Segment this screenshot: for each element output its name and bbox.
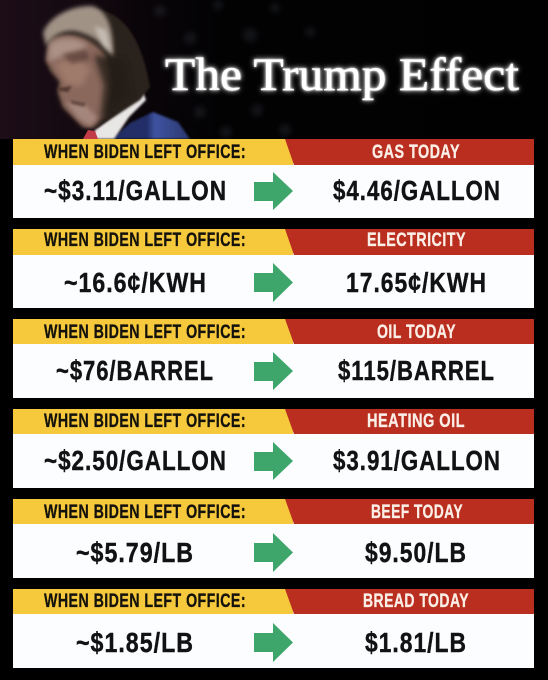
panel: beef: ~$5.79/LB <box>76 537 194 568</box>
panel: oil: OIL TODAY <box>377 322 456 343</box>
panel: gas <box>13 139 534 218</box>
jowl crease <box>70 100 86 107</box>
panel: heating oil: $3.91/GALLON <box>333 445 501 476</box>
face <box>46 35 110 128</box>
head base <box>46 10 150 128</box>
suit jacket <box>112 112 190 139</box>
portrait photo <box>43 6 190 139</box>
panel: bread: WHEN BIDEN LEFT OFFICE: <box>44 591 246 612</box>
panel: heating oil: HEATING OIL <box>367 411 465 432</box>
panel: gas: ~$3.11/GALLON <box>44 175 227 206</box>
hair highlight <box>94 26 112 54</box>
arrow <box>254 172 293 210</box>
arrow <box>254 263 293 302</box>
arrow <box>254 352 293 390</box>
panel: bread: ~$1.85/LB <box>76 627 194 658</box>
panel: heating oil: ~$2.50/GALLON <box>44 445 227 476</box>
arrow <box>254 533 293 572</box>
eye socket <box>62 50 90 64</box>
panel: bread <box>13 589 534 668</box>
mouth <box>58 86 72 92</box>
panel: electricity: ELECTRICITY <box>367 230 466 251</box>
panel: beef <box>13 499 534 578</box>
neck and jaw highlight <box>66 102 98 126</box>
panel: gas: WHEN BIDEN LEFT OFFICE: <box>44 142 246 163</box>
panel: electricity <box>13 229 534 308</box>
panel: gas: $4.46/GALLON <box>333 175 501 206</box>
panel: oil: WHEN BIDEN LEFT OFFICE: <box>44 322 246 343</box>
panel: oil: $115/BARREL <box>338 355 495 386</box>
panel: beef: WHEN BIDEN LEFT OFFICE: <box>44 502 246 523</box>
face side shading <box>92 52 114 120</box>
panel: oil <box>13 319 534 398</box>
title: The Trump Effect <box>165 49 519 101</box>
panel: electricity: ~16.6¢/KWH <box>64 267 207 298</box>
arrow <box>254 623 293 662</box>
panel: oil: ~$76/BARREL <box>56 355 214 386</box>
panel: bread: BREAD TODAY <box>363 591 469 612</box>
panel: bread: $1.81/LB <box>365 627 467 658</box>
panel: electricity: 17.65¢/KWH <box>346 267 487 298</box>
forehead highlight <box>48 38 88 62</box>
panel: beef: BEEF TODAY <box>371 502 463 523</box>
necktie <box>83 130 98 139</box>
header background with faint stars <box>0 0 316 139</box>
arrow <box>254 442 293 480</box>
panel: gas: GAS TODAY <box>372 142 460 163</box>
panel: heating oil: WHEN BIDEN LEFT OFFICE: <box>44 411 246 432</box>
front hair <box>43 6 113 58</box>
shirt collar <box>93 92 146 139</box>
panel: beef: $9.50/LB <box>365 537 467 568</box>
nose and cheek highlight <box>56 60 90 86</box>
panel: electricity: WHEN BIDEN LEFT OFFICE: <box>44 230 246 251</box>
panel: heating oil <box>13 409 534 488</box>
